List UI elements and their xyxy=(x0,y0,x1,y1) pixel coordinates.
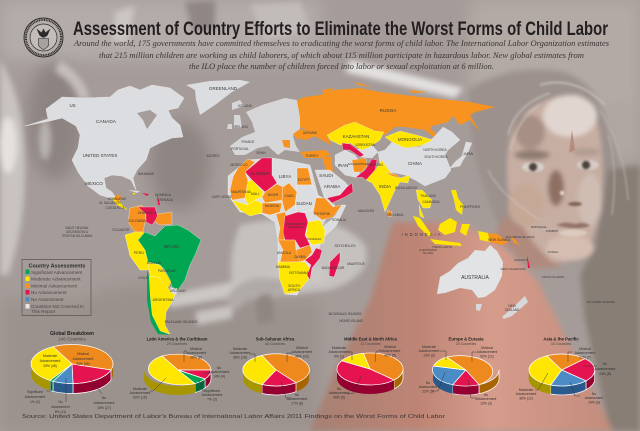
country labels: CHILE xyxy=(138,276,149,280)
pie: Sub-Saharan Africa: Minimal xyxy=(296,346,308,350)
country labels: PAKISTAN xyxy=(367,163,383,167)
pie: Asia and the Pacific: 33 Countries xyxy=(551,342,571,346)
pie: Asia and the Pacific: Advancement xyxy=(575,351,595,355)
country labels: ARABIA xyxy=(324,184,340,189)
pie: Europe and Eurasia: No xyxy=(426,381,430,385)
pie: Sub-Saharan Africa: Advancement xyxy=(287,397,307,401)
pie: global breakdown: No xyxy=(102,396,106,400)
country labels: IRAN xyxy=(338,163,348,168)
country labels: KAZAHSTAN xyxy=(343,134,369,139)
pie: Sub-Saharan Africa: Moderate xyxy=(233,347,247,351)
country labels: UNITED STATES xyxy=(83,153,117,158)
country labels: ARGENTINA xyxy=(153,298,174,302)
pie: Middle East and North Africa: 9% (1) xyxy=(334,354,344,358)
pie: global breakdown: Minimal xyxy=(77,352,89,356)
pie: Latin America and the Caribbean: 14% (4) xyxy=(213,374,225,378)
bindi xyxy=(569,130,575,153)
country labels: DEMOCRATIC xyxy=(286,222,307,226)
country labels: NIGERIA xyxy=(265,204,280,208)
country labels: INDONESIA xyxy=(401,232,443,237)
pie: Middle East and North Africa xyxy=(329,336,403,400)
pie: Europe and Eurasia: Advancement xyxy=(477,350,497,354)
face shape xyxy=(507,95,603,263)
pie: global breakdown: 19% (27) xyxy=(97,406,111,410)
legend: country assessments: Countries Not Covered In xyxy=(31,304,84,309)
country labels: BOLIVIA xyxy=(147,261,162,265)
country labels: ECUADOR xyxy=(113,228,130,232)
pie: Asia and the Pacific xyxy=(516,336,615,404)
pie: Latin America and the Caribbean: Significant xyxy=(204,389,220,393)
pie: global breakdown: 146 Countries xyxy=(58,336,86,342)
map: Russia xyxy=(297,88,495,148)
pie: Europe and Eurasia: Assessment xyxy=(419,385,437,389)
country labels: TONGA xyxy=(548,250,558,254)
pie: Middle East and North Africa: Advancement xyxy=(329,391,349,395)
pie: Middle East and North Africa: Advancement xyxy=(329,350,349,354)
map: South America xyxy=(125,205,201,335)
legend: country assessments: No Advancement xyxy=(31,290,67,295)
country labels: URUGUAY xyxy=(170,289,187,293)
map: Central America and Caribbean xyxy=(112,190,160,210)
pie: Asia and the Pacific: Asia & the Pacific xyxy=(543,336,579,342)
country labels: SOLOMON ISLANDS xyxy=(505,235,535,239)
country labels: UKRAINE xyxy=(303,131,317,135)
country labels: FRANCE xyxy=(241,140,255,144)
pie: Latin America and the Caribbean: 52% (15) xyxy=(133,396,147,400)
pie: Europe and Eurasia: No xyxy=(484,393,488,397)
country labels: SUDAN xyxy=(296,201,312,206)
country labels: COOK ISLANDS xyxy=(542,275,564,279)
map: Greenland xyxy=(186,80,250,115)
pie: Latin America and the Caribbean: Moderate xyxy=(133,387,147,391)
world map xyxy=(25,80,615,335)
pie: global breakdown: Assessment xyxy=(51,405,70,409)
map: Tasmania and New Zealand xyxy=(476,296,528,319)
legend: country assessments: Significant Advancement xyxy=(31,270,83,275)
pie: Sub-Saharan Africa: No xyxy=(295,393,299,397)
country labels: ALGERIA xyxy=(250,171,270,176)
country labels: PORTUGAL xyxy=(231,147,249,151)
pie: Asia and the Pacific: 36% (12) xyxy=(519,396,533,400)
legend: country assessments xyxy=(22,260,91,316)
country labels: SOUTH KOREA xyxy=(424,155,448,159)
pie: global breakdown: Advancement xyxy=(40,359,60,363)
country labels: NEW CALEDONIA xyxy=(500,267,526,271)
pie: Middle East and North Africa: 45% (5) xyxy=(333,396,345,400)
country labels: MAURITANIA xyxy=(231,190,252,194)
country labels: SAINT HELENA, xyxy=(65,226,89,230)
pie: Asia and the Pacific: Assessment xyxy=(585,396,603,400)
country labels: CAMBODIA xyxy=(422,200,440,204)
country labels: AFRICA xyxy=(288,288,301,292)
country labels: MCDONALD ISLANDS xyxy=(329,312,361,316)
pie: Europe and Eurasia: Advancement xyxy=(476,397,496,401)
country labels: BAHAMAS xyxy=(138,172,154,176)
country labels: SPAIN xyxy=(256,151,266,155)
country labels: SAUDI xyxy=(319,173,333,178)
country labels: INDIA xyxy=(379,184,391,189)
pie: global breakdown xyxy=(25,331,114,414)
pie: Asia and the Pacific: Moderate xyxy=(519,388,533,392)
pie: Middle East and North Africa: No xyxy=(337,387,341,391)
pie: global breakdown: No xyxy=(58,400,63,404)
country labels: MAURITIUS xyxy=(347,262,365,266)
country labels: NEW GUINEA xyxy=(488,238,511,242)
pie: Sub-Saharan Africa: Sub-Saharan Africa xyxy=(256,336,295,342)
map: Africa xyxy=(228,158,346,295)
country labels: REPUBLIC xyxy=(288,225,304,229)
country labels: EL SALVADOR xyxy=(99,201,121,205)
pie: Middle East and North Africa: Advancement xyxy=(380,349,400,353)
country labels: CHINA xyxy=(408,161,422,166)
country labels: PERU xyxy=(134,251,144,255)
intro text xyxy=(73,39,609,71)
pie: Europe and Eurasia: 13% (3) xyxy=(480,402,492,406)
country labels: RUSSIA xyxy=(380,108,396,113)
pie: global breakdown: 1% (2) xyxy=(30,400,40,404)
country labels: MARSHALL xyxy=(531,225,547,229)
pie: Latin America and the Caribbean: Advancement xyxy=(186,351,206,355)
map: northern Russia islands xyxy=(322,82,428,95)
country labels: SOMALIA xyxy=(332,218,347,222)
pie: Asia and the Pacific: No xyxy=(592,392,596,396)
country labels: AFGHANISTAN xyxy=(347,162,369,166)
map: Ukraine, Turkey and Caucasus xyxy=(282,129,333,172)
pie: Europe and Eurasia: 23 Countries xyxy=(456,342,476,346)
pie: Sub-Saharan Africa: 38% (18) xyxy=(233,356,247,360)
pie: Latin America and the Caribbean: 29 Countries xyxy=(167,342,187,346)
pie: global breakdown: Advancement xyxy=(25,395,45,399)
country labels: CHAD xyxy=(284,194,294,198)
map: Australia xyxy=(437,245,503,298)
map: Asia xyxy=(315,122,472,218)
country labels: ICELAND xyxy=(238,104,253,108)
country labels: GRENADA xyxy=(157,198,174,202)
country labels xyxy=(62,86,615,324)
pie: Sub-Saharan Africa: 48 Countries xyxy=(265,342,285,346)
pie: global breakdown: Global Breakdown xyxy=(50,331,94,337)
country labels: MADAGASCAR xyxy=(322,266,345,270)
legend: country assessments: Country Assessments xyxy=(29,264,85,270)
pie: Sub-Saharan Africa: 46% (22) xyxy=(295,354,309,358)
country labels: VANUATU xyxy=(514,258,528,262)
legend: country assessments: This Report xyxy=(31,309,56,314)
pie: Latin America and the Caribbean: 28% (8) xyxy=(190,356,202,360)
legend: country assessments: Moderate Advancement xyxy=(31,276,81,282)
country labels: THAILAND xyxy=(420,194,437,198)
country labels: NORTH KOREA xyxy=(423,148,448,152)
pie: Europe and Eurasia: 52% (12) xyxy=(480,354,494,358)
legend: country assessments: No Assessment xyxy=(31,297,64,302)
country labels: AUSTRALIA xyxy=(461,275,490,281)
country labels: ZAMBIA xyxy=(294,255,307,259)
pie: Middle East and North Africa: 46% (5) xyxy=(384,354,396,358)
map: North America xyxy=(25,85,184,198)
map: Southeast Asia and Indonesia xyxy=(413,190,530,268)
pie: global breakdown: 8% (11) xyxy=(55,410,66,414)
pie: Asia and the Pacific: Advancement xyxy=(595,367,615,371)
pie: Europe and Eurasia: Moderate xyxy=(422,345,436,349)
pie: Latin America and the Caribbean xyxy=(130,336,229,402)
country labels: NAMIBIA xyxy=(276,265,291,269)
country labels: UZBEKISTAN xyxy=(355,143,376,147)
pie: Europe and Eurasia xyxy=(419,336,499,406)
country labels: FALKLAND ISLANDS xyxy=(165,320,198,324)
country labels: US xyxy=(69,103,76,108)
pie: global breakdown: Advancement xyxy=(94,401,114,405)
country labels: EGYPT xyxy=(298,178,311,182)
pie: global breakdown: Significant xyxy=(27,390,43,394)
country labels: MONGOLIA xyxy=(398,137,422,142)
country labels: COLOMBIA xyxy=(128,219,147,223)
pie: Middle East and North Africa: Middle East & North Africa xyxy=(344,336,397,342)
pie: Europe and Eurasia: Advancement xyxy=(419,349,439,353)
pie: Sub-Saharan Africa: 17% (8) xyxy=(291,402,303,406)
country labels: CHRISTMAS xyxy=(419,248,437,252)
country labels: CAPE VERDE xyxy=(212,195,232,199)
legend: country assessments: Minimal Advancement xyxy=(31,284,78,288)
country labels: TURKEY xyxy=(306,154,319,158)
pie: global breakdown: 39% (56) xyxy=(76,362,90,366)
country labels: GREENLAND xyxy=(209,86,238,91)
pie: Asia and the Pacific: Minimal xyxy=(579,347,591,351)
pie: Middle East and North Africa: Moderate xyxy=(332,346,346,350)
pie: Europe and Eurasia: 13% (3) xyxy=(423,354,435,358)
country labels: KIRIBATI xyxy=(546,229,558,233)
map: Europe xyxy=(227,98,300,155)
intro text: Around the world, 175 governments have committed themselves to eradicating the worst forms of child labor. The International Labor Organization estimates xyxy=(73,39,609,48)
pie: global breakdown: Moderate xyxy=(43,354,57,358)
pie: Asia and the Pacific: 19% (6) xyxy=(588,400,600,404)
pie: Middle East and North Africa: 11 Countries xyxy=(360,342,381,346)
pie: Asia and the Pacific: Advancement xyxy=(516,392,536,396)
country labels: AZORES xyxy=(206,154,220,158)
pie: Sub-Saharan Africa: Advancement xyxy=(292,350,312,354)
country labels: HEARD ISLAND xyxy=(339,319,363,323)
country labels: HONDURAS xyxy=(108,197,126,201)
pie: Europe and Eurasia: Minimal xyxy=(481,346,493,350)
pie: Europe and Eurasia: 22% (5) xyxy=(422,390,434,394)
country labels: BRAZIL xyxy=(164,244,180,249)
pie: Europe and Eurasia: Europe & Eurasia xyxy=(449,336,484,342)
intro text: the ILO place the number of children forced into labor or sexual exploitation at 6 million. xyxy=(189,62,494,71)
source line: Source: United States Department of Labor's Bureau of International Labor Affairs 2011 Findings on the Worst Forms of Child Labor xyxy=(22,414,445,420)
pie: Asia and the Pacific: 21% (7) xyxy=(579,356,591,360)
pie: Latin America and the Caribbean: 7% (2) xyxy=(207,398,217,402)
pie: Sub-Saharan Africa xyxy=(230,336,312,406)
country labels: TRISTAN DA CUNHA xyxy=(62,234,93,238)
country labels: SRI LANKA xyxy=(387,213,404,217)
pie: Latin America and the Caribbean: Advancement xyxy=(209,370,229,374)
country labels: ANGOLA xyxy=(277,251,292,255)
hair and dark backdrop xyxy=(468,69,628,262)
pie: Latin America and the Caribbean: Advancement xyxy=(202,393,222,397)
country labels: SOUTH xyxy=(288,284,300,288)
pie: Middle East and North Africa: Minimal xyxy=(384,345,396,349)
country labels: MEXICO xyxy=(85,181,103,186)
country labels: JAPAN xyxy=(463,152,474,156)
pie: Latin America and the Caribbean: Minimal xyxy=(190,347,202,351)
country labels: TANZANIA xyxy=(307,237,321,241)
country labels: NEW xyxy=(508,304,516,308)
country labels: PHILIPPINES xyxy=(460,205,480,209)
country labels: MALI xyxy=(251,192,259,196)
country labels: NIGER xyxy=(268,193,279,197)
Department of Labor seal xyxy=(24,18,63,57)
country labels: COSTA RICA xyxy=(105,206,125,210)
country labels: TIMOR LESTE xyxy=(432,245,452,249)
country labels: BANGLADESH xyxy=(395,186,418,190)
country labels: PITCAIRN ISLANDS xyxy=(587,300,615,304)
pie: Latin America and the Caribbean: Advancement xyxy=(130,391,150,395)
country labels: BOTSWANA xyxy=(289,271,309,275)
pie: Asia and the Pacific: 24% (8) xyxy=(599,372,611,376)
country labels: ISLAND xyxy=(423,251,434,255)
pie: global breakdown: 33% (48) xyxy=(43,364,57,368)
country labels: PARAGUAY xyxy=(158,269,177,273)
country labels: DOMINICA xyxy=(155,193,172,197)
pie: Asia and the Pacific: No xyxy=(603,362,607,366)
country labels: MALDIVES xyxy=(358,209,374,213)
country labels: ASCENSION & xyxy=(66,230,89,234)
country labels: VENEZUELA xyxy=(138,211,157,215)
country labels: CANADA xyxy=(96,119,117,125)
pie: global breakdown: Advancement xyxy=(73,357,93,361)
country labels: ETHIOPIA xyxy=(314,212,331,216)
country labels: ZEALAND xyxy=(505,308,520,312)
country labels: LIBYA xyxy=(279,174,291,179)
intro text: that 215 million children are working as child laborers, of which about 115 million participate in hazardous labor. New global estimates from xyxy=(99,51,584,60)
country labels: SEYCHELLES xyxy=(335,244,355,248)
pie: Sub-Saharan Africa: Advancement xyxy=(230,351,250,355)
pie: Latin America and the Caribbean: Latin America & the Caribbean xyxy=(147,336,208,342)
map: Hudson Bay xyxy=(137,110,157,129)
country labels: IRELAND xyxy=(234,125,249,129)
pie: Latin America and the Caribbean: No xyxy=(217,366,221,370)
country labels: MOROCCO xyxy=(230,163,248,167)
